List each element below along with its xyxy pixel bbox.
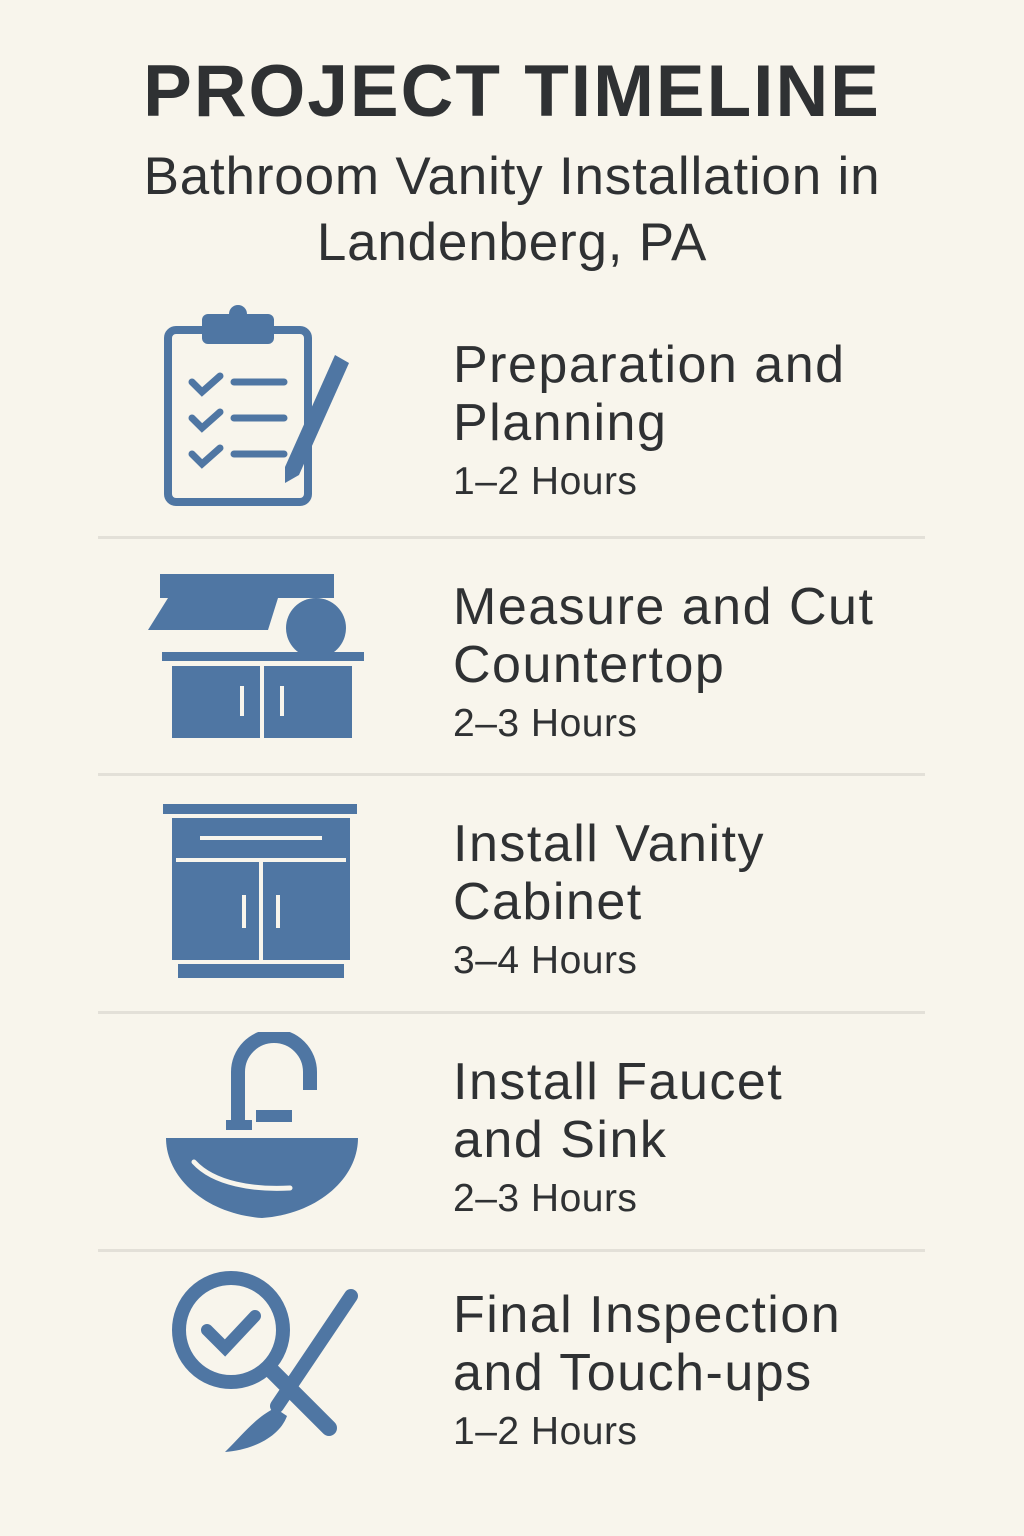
step 5 text xyxy=(453,1286,841,1453)
icon: vanity cabinet xyxy=(163,804,357,978)
step 1 text: Planning xyxy=(453,394,667,452)
step 5 text: Final Inspection xyxy=(453,1286,841,1344)
step 1 text: 1–2 Hours xyxy=(453,460,637,503)
step 4 text xyxy=(453,1053,783,1220)
step 2 text: Countertop xyxy=(453,636,725,694)
step 2 text: 2–3 Hours xyxy=(453,702,637,745)
step 2 text xyxy=(453,578,874,745)
step 3 text: 3–4 Hours xyxy=(453,939,637,982)
step 4 text: 2–3 Hours xyxy=(453,1177,637,1220)
subtitle xyxy=(144,147,880,272)
icon: countertop xyxy=(148,574,364,738)
subtitle: Bathroom Vanity Installation in xyxy=(144,147,880,206)
icon: inspection xyxy=(172,1271,358,1452)
step 4 text: and Sink xyxy=(453,1111,667,1169)
step 4 text: Install Faucet xyxy=(453,1053,783,1111)
icon: faucet and sink xyxy=(166,1032,358,1218)
icon: clipboard xyxy=(164,305,349,506)
step 1 text xyxy=(453,336,846,503)
step 3 text xyxy=(453,815,765,982)
subtitle: Landenberg, PA xyxy=(317,213,707,272)
step 2 text: Measure and Cut xyxy=(453,578,874,636)
step 3 text: Install Vanity xyxy=(453,815,765,873)
title: PROJECT TIMELINE xyxy=(143,51,881,132)
step 5 text: and Touch-ups xyxy=(453,1344,813,1402)
step 3 text: Cabinet xyxy=(453,873,643,931)
step 5 text: 1–2 Hours xyxy=(453,1410,637,1453)
step 1 text: Preparation and xyxy=(453,336,846,394)
